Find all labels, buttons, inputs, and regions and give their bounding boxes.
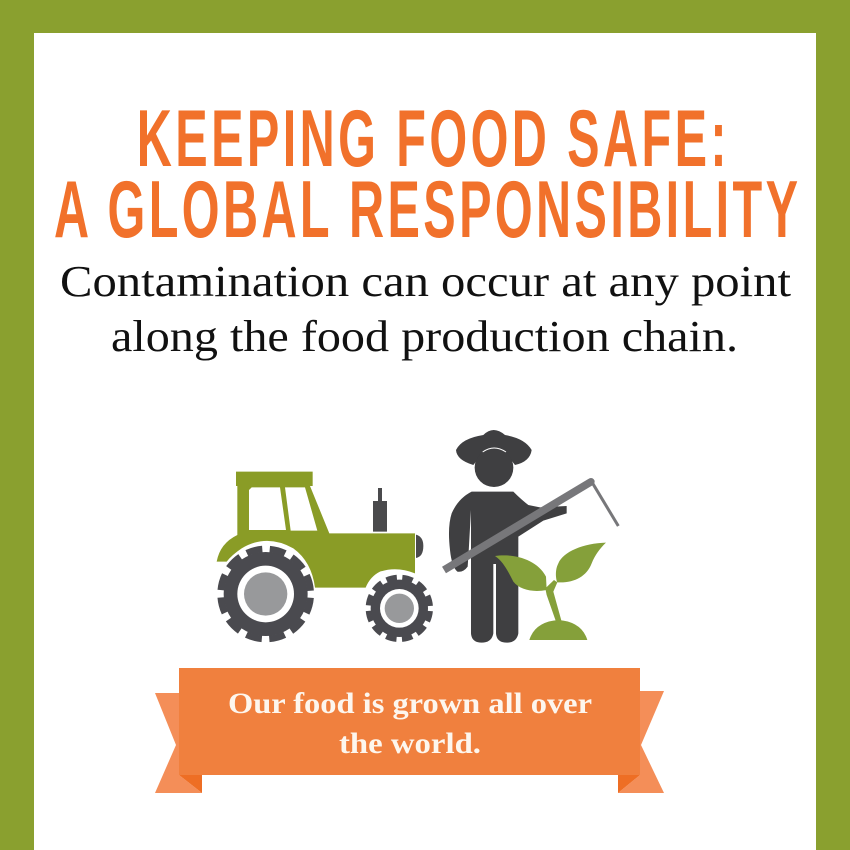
ribbon text: Our food is grown all over — [228, 687, 592, 720]
tractor front grille — [416, 535, 423, 558]
front wheel — [368, 577, 430, 639]
subtitle: Contamination can occur at any point — [60, 257, 791, 306]
icon: tractor — [217, 472, 430, 639]
rear wheel — [221, 549, 311, 639]
head — [475, 448, 513, 487]
title — [54, 94, 798, 255]
scythe — [444, 479, 618, 570]
ribbon tails — [155, 691, 664, 793]
tractor exhaust — [373, 488, 387, 532]
ribbon text — [228, 687, 592, 760]
seedling — [495, 543, 606, 640]
subtitle: along the food production chain. — [111, 312, 738, 361]
hat — [456, 430, 532, 465]
title: KEEPING FOOD SAFE: — [137, 94, 727, 184]
subtitle — [60, 257, 791, 361]
ribbon main band — [179, 668, 640, 775]
tractor windows — [249, 487, 317, 531]
tractor body — [217, 472, 415, 588]
ribbon banner — [155, 668, 664, 793]
icon: farmer with scythe — [444, 430, 618, 643]
hat band highlight — [483, 448, 506, 452]
title: A GLOBAL RESPONSIBILITY — [54, 165, 798, 255]
body — [449, 492, 567, 643]
ribbon folds — [179, 775, 640, 793]
ribbon text: the world. — [339, 727, 481, 760]
